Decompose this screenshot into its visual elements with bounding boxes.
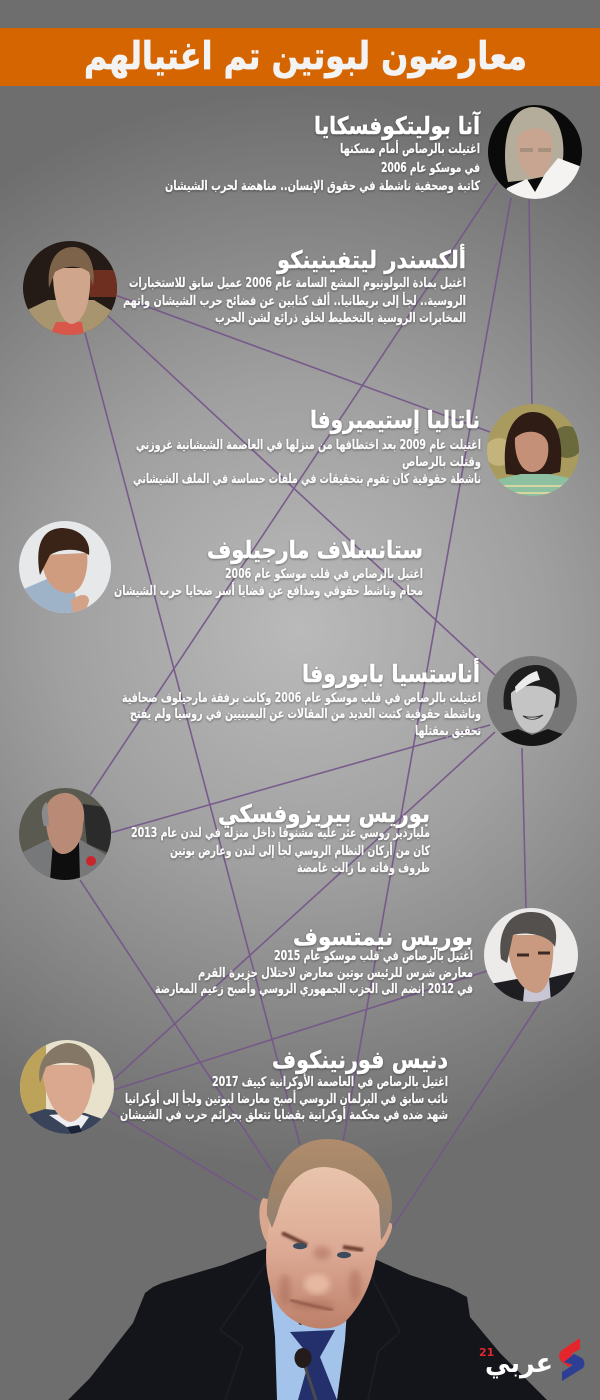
text: Natalia Estemirova [133,406,481,487]
details [114,567,423,599]
portrait: Denis Voronenkov [20,1040,114,1134]
face [266,1160,382,1329]
details: اغتيل بمادة البولونيوم المشع السامة عام 2006 عميل سابق للاستخبارات [129,276,466,291]
details [165,140,480,194]
details: تحقيق بمقتلها [415,724,481,739]
details [120,1073,448,1123]
text: Boris Nemtsov [155,923,473,997]
logo wordmark: عربي [485,1348,553,1379]
details: اغتيل بالرصاص في قلب موسكو عام 2006 [225,567,423,582]
shirt [270,1287,347,1400]
title: معارضون لبوتين تم اغتيالهم [84,34,527,79]
portrait: Anna Politkovskaya [488,105,582,199]
details [133,438,481,487]
logo number: 21 [479,1346,494,1359]
name: أناستسيا بابوروفا [302,658,480,688]
name: ستانسلاف مارجيلوف [207,536,423,564]
name: ألكسندر ليتفينينكو [276,244,466,274]
microphone [303,1360,316,1400]
details: وناشطة حقوقية كتبت العديد من المقالات عن اليمينيين في روسيا ولم يفتح [130,707,481,722]
details [155,949,473,997]
details [131,826,430,876]
details: ملياردير روسي عثر عليه مشنوقا داخل منزله في لندن عام 2013 [131,826,430,841]
portrait: Boris Nemtsov [484,908,578,1002]
details: كاتبة وصحفية ناشطة في حقوق الإنسان.. مناهضة لحرب الشيشان [165,179,480,194]
details: الروسية.. لجأ إلى بريطانيا.. ألف كتابين عن فضائح حرب الشيشان واتهم [123,292,466,309]
portrait: Natalia Estemirova [485,404,583,496]
name: بوريس بيريزوفسكي [218,800,430,828]
portrait: Vladimir Putin [68,1139,547,1400]
details: معارض شرس للرئيس بوتين معارض لاحتلال جزيرة القرم [198,966,473,981]
details: كان من أركان النظام الروسي لجأ إلى لندن وعارض بوتين [170,842,430,859]
details [122,691,481,739]
portrait: Alexander Litvinenko [23,241,117,335]
details: وقتلت بالرصاص [402,455,481,470]
text: Boris Berezovsky [131,800,430,876]
text: Denis Voronenkov [120,1046,448,1123]
name: دنيس فورنينكوف [272,1046,448,1074]
portrait: Boris Berezovsky [19,788,111,880]
details: ظروف وفاته ما زالت غامضة [297,861,430,876]
suit [68,1248,547,1400]
details: اغتيل بالرصاص في العاصمة الأوكرانية كييف 2017 [212,1073,448,1090]
title banner [0,28,600,86]
portrait: Stanislav Markelov [19,521,111,613]
text: Anastasia Baburova [122,658,481,739]
text: Anna Politkovskaya [165,111,481,194]
face shading [279,1246,361,1310]
logo: Arabi21 [479,1338,584,1381]
details: اغتيلت عام 2009 بعد اختطافها من منزلها في العاصمة الشيشانية غروزني [136,438,481,453]
details: في 2012 إنضم الى الحزب الجمهوري الروسي وأصبح زعيم المعارضة [155,980,473,997]
text: Stanislav Markelov [114,536,423,599]
nose and mouth [304,1274,330,1294]
portrait: Anastasia Baburova [487,656,577,746]
name: آنا بوليتكوفسكايا [314,111,481,140]
details: نائب سابق في البرلمان الروسي أصبح معارضا لبوتين ولجأ إلى أوكرانيا [125,1090,448,1107]
tie [290,1330,337,1400]
details: في موسكو عام 2006 [381,161,480,176]
details [123,276,466,326]
hair [267,1139,392,1240]
details: محام وناشط حقوقي ومدافع عن قضايا أسر ضحايا حرب الشيشان [114,582,423,599]
ears [259,1198,392,1258]
eyes and brows [282,1233,363,1250]
details: المخابرات الروسية بالتخطيط لخلق ذرائع لشن الحرب [215,311,466,326]
logo mark [559,1338,584,1381]
details: اغتيلت بالرصاص في قلب موسكو عام 2006 وكانت برفقة مارجيلوف صحافية [122,691,481,706]
details: اغتيل بالرصاص في قلب موسكو عام 2015 [274,949,473,964]
connection lines [80,183,543,1227]
details: اغتيلت بالرصاص أمام مسكنها [340,140,480,157]
lapels [220,1262,400,1400]
details: شهد ضده في محكمة أوكرانية بقضايا تتعلق بجرائم حرب في الشيشان [120,1106,448,1123]
text: Alexander Litvinenko [123,244,466,326]
name: بوريس نيمتسوف [293,923,473,951]
name: ناتاليا إستيميروفا [310,406,480,434]
